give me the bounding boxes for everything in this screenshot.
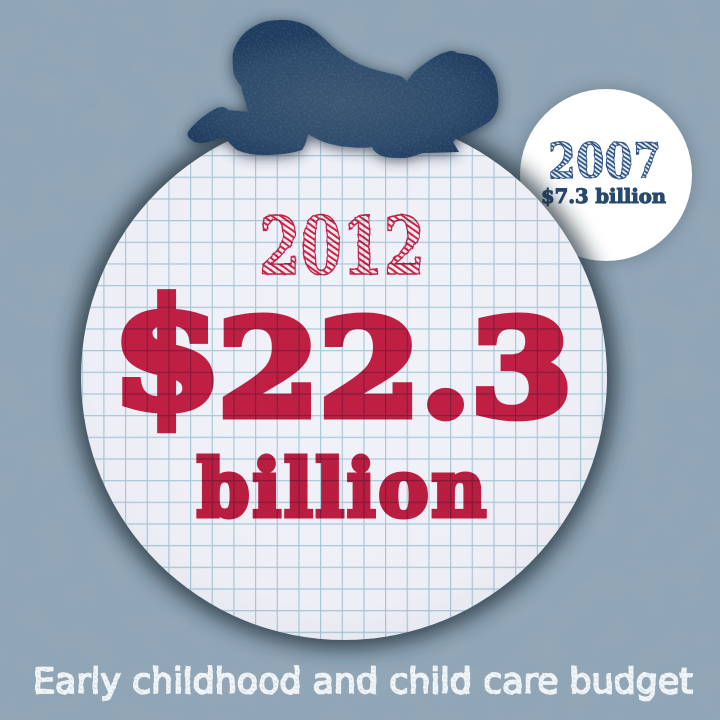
- big graph-paper circle: [81, 114, 607, 640]
- caption: Early childhood and child care budget: [33, 662, 693, 702]
- icon: baby silhouette: [188, 20, 498, 158]
- small circle: 2007: [517, 86, 695, 264]
- big circle shadow: [72, 105, 616, 649]
- year 2007: 2007: [548, 132, 661, 190]
- dollar sign: $: [112, 268, 222, 443]
- word billion: billion: [197, 442, 489, 535]
- grid lines: [81, 114, 607, 640]
- amount: $7.3 billion: $7.3 billion: [541, 184, 666, 208]
- 2012 sketched year: 2012: [259, 199, 425, 293]
- baby shadow: [175, 12, 510, 167]
- amount 22.3: 22.3: [218, 292, 572, 447]
